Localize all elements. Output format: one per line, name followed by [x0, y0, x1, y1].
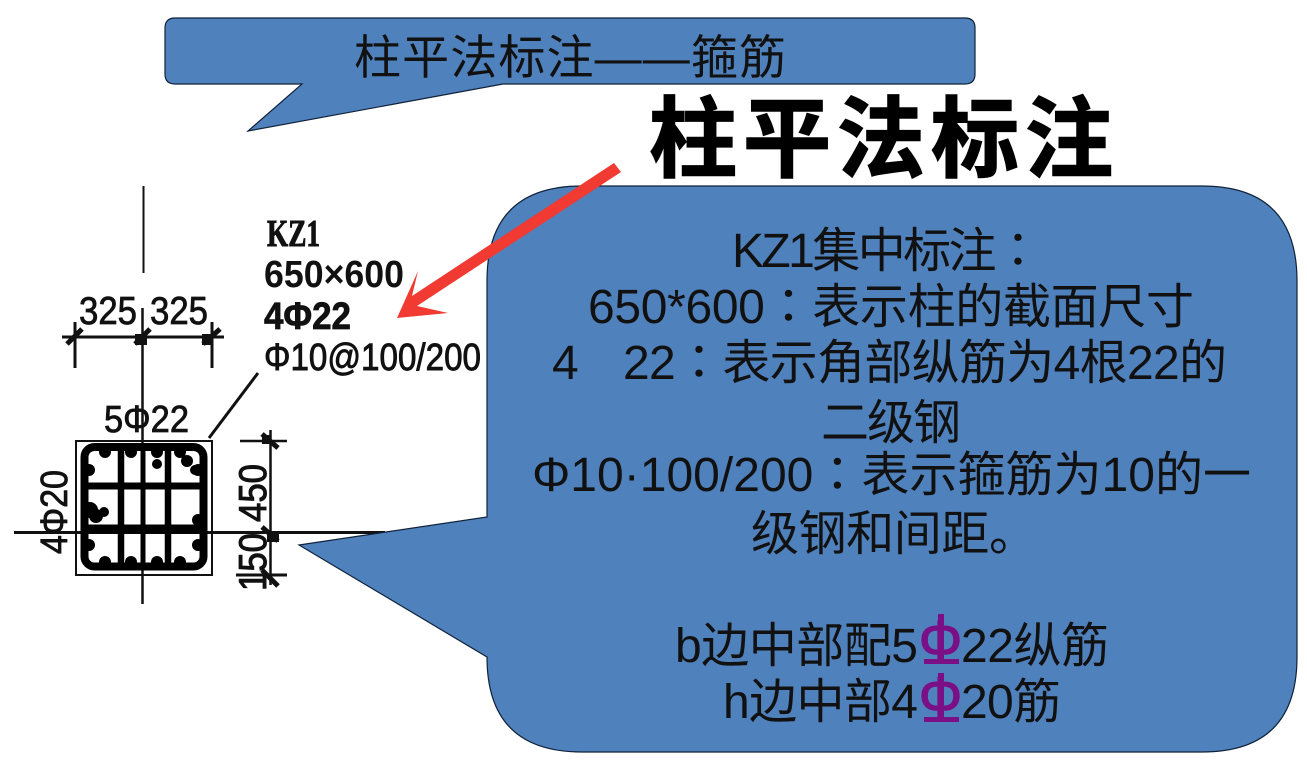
callout explanation text — [532, 211, 1251, 729]
leader line — [209, 373, 258, 438]
dimension label 150 rotated: 150 — [232, 533, 275, 591]
right dimension line — [236, 430, 287, 586]
column label KZ1 annotation: KZ1 — [267, 213, 320, 255]
banner heading: 柱平法标注——箍筋 — [354, 31, 786, 84]
dimension labels 325 325: 325 — [150, 290, 208, 333]
callout explanation text: b边中部配5 — [675, 620, 918, 673]
callout explanation text: KZ1集中标注： — [732, 211, 1042, 281]
callout explanation text: 20筋 — [961, 676, 1061, 729]
column label KZ1 annotation: 4Φ22 — [264, 296, 351, 338]
main explanation callout — [299, 186, 1297, 752]
callout explanation text: 级钢和间距。 — [751, 508, 1037, 561]
axis lines — [14, 186, 385, 604]
top dimension line — [62, 322, 224, 368]
purple rebar symbol, h side: Φ — [919, 665, 962, 728]
dimension labels 325 325 — [79, 290, 208, 333]
label 5Φ22: 5Φ22 — [104, 399, 189, 441]
callout explanation text: 22纵筋 — [961, 620, 1109, 673]
callout explanation text: 二级钢 — [821, 397, 961, 450]
dimension label 450 rotated: 450 — [232, 464, 275, 522]
column section drawing — [14, 186, 481, 604]
purple rebar symbol, b side: Φ — [919, 609, 962, 672]
callout explanation text: 4 — [552, 337, 579, 390]
top callout banner — [165, 18, 975, 131]
callout explanation text: Φ10·100/200：表示箍筋为10的一 — [532, 435, 1251, 505]
column label KZ1 annotation: Φ10@100/200 — [264, 337, 481, 379]
dimension labels 325 325: 325 — [79, 290, 137, 333]
label 4Φ20 rotated: 4Φ20 — [34, 470, 76, 554]
callout explanation text: 22：表示角部纵筋为4根22的 — [623, 323, 1227, 393]
callout explanation text: h边中部4 — [723, 676, 918, 729]
callout explanation text: 650*600：表示柱的截面尺寸 — [588, 267, 1194, 337]
column label KZ1 annotation: 650×600 — [264, 254, 404, 296]
column label KZ1 annotation — [264, 213, 481, 379]
column cross section with rebar — [76, 441, 212, 575]
large title: 柱平法标注 — [649, 90, 1113, 189]
red arrow — [397, 163, 621, 318]
